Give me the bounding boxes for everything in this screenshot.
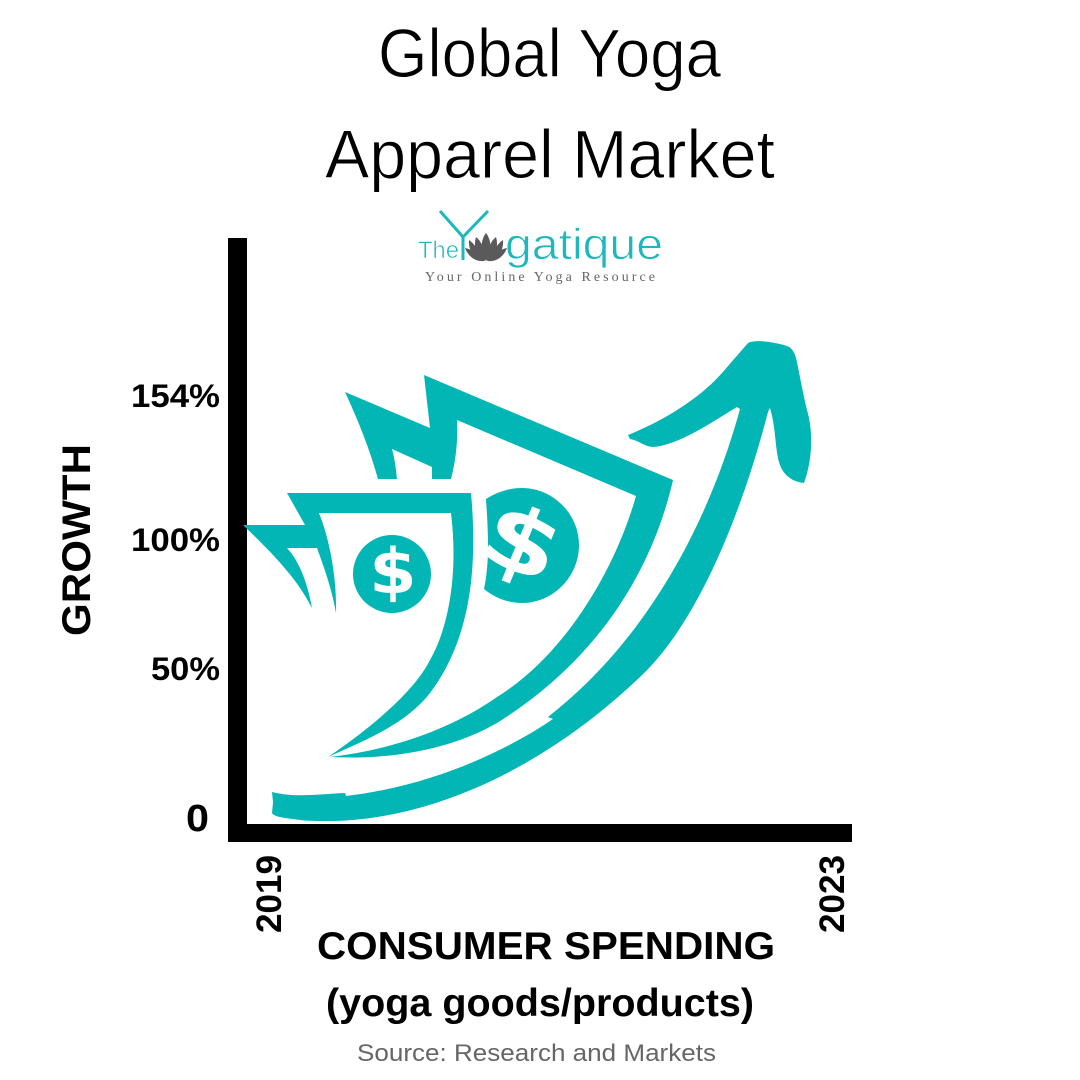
growth arrow [272, 341, 811, 821]
y axis labels [131, 378, 220, 840]
icon: dollar coin back: $ [467, 481, 577, 604]
icon: dollar coin front [353, 535, 431, 613]
x axis year 2023: 2023 [813, 855, 852, 933]
title: Global Yoga [378, 15, 722, 92]
x axis title [317, 925, 775, 1025]
back dollar bill [330, 375, 673, 758]
x axis title: CONSUMER SPENDING [317, 925, 775, 968]
title: Apparel Market [325, 116, 775, 193]
y axis title: GROWTH [55, 444, 99, 636]
y axis labels: 100% [131, 522, 220, 558]
front dollar bill [243, 493, 473, 757]
source note: Source: Research and Markets [357, 1040, 716, 1067]
logo: The Yogatique: The [418, 237, 459, 264]
x axis title: (yoga goods/products) [326, 982, 754, 1025]
x axis year 2019: 2019 [250, 855, 289, 933]
y axis labels: 154% [131, 378, 220, 414]
icon: dollar coin front: $ [369, 537, 417, 608]
logo: The Yogatique: gatique [505, 220, 663, 269]
logo: The Yogatique [418, 211, 663, 285]
icon: lotus [465, 233, 507, 261]
y axis labels: 0 [186, 798, 209, 840]
logo: The Yogatique: Your Online Yoga Resource [425, 270, 655, 285]
y and x axes [228, 238, 852, 842]
y axis labels: 50% [151, 651, 220, 687]
title [325, 15, 775, 193]
